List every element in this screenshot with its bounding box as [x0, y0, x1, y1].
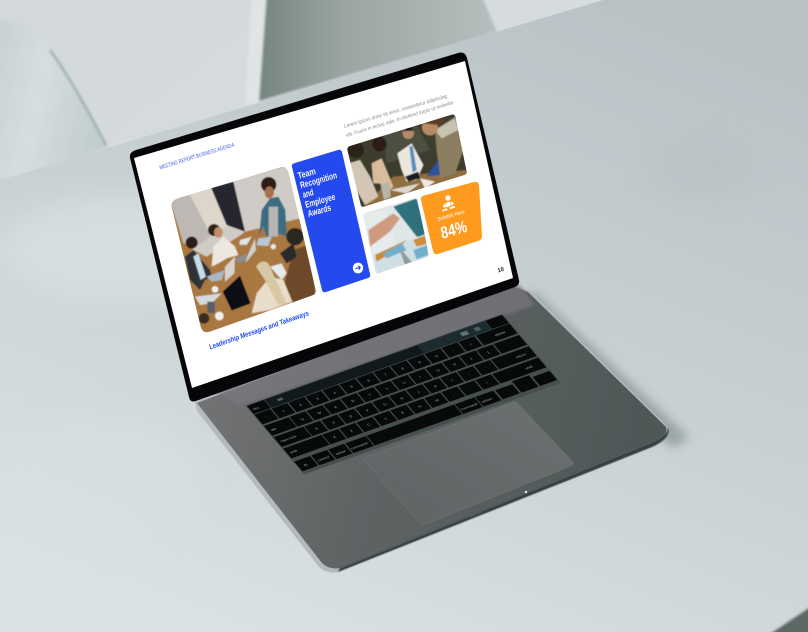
panel: orange stat card	[421, 182, 482, 254]
trackpad	[364, 402, 573, 525]
intro text block: elit. Fusce in lectus odio. In eleifend turpis ut molestie	[346, 100, 454, 139]
thumb notch and status light	[470, 491, 527, 517]
page number: 10	[497, 267, 505, 274]
front rim shadow	[338, 427, 669, 572]
card heading: Team	[297, 166, 317, 181]
keyboard	[245, 314, 561, 475]
card heading: and	[302, 187, 315, 200]
key legends	[252, 321, 548, 468]
laptop lid bezel	[130, 53, 519, 402]
panel: blue title card	[292, 150, 370, 292]
stat label: Subtitle Here	[437, 209, 465, 223]
card heading: Awards	[307, 203, 332, 219]
standing person at right	[435, 117, 463, 178]
photo panel: team meeting around table	[172, 167, 316, 332]
left chair	[0, 21, 108, 185]
icon: people	[442, 195, 455, 212]
dark table corner	[758, 602, 808, 632]
man with tie	[397, 143, 423, 182]
slide screen	[134, 61, 513, 388]
laptop base	[195, 283, 669, 572]
slide heading: MEETING REPORT BUSINESS AGENDA	[159, 142, 235, 171]
back chair	[245, 0, 497, 106]
woman in white sweater	[212, 237, 238, 267]
card heading: Employee	[304, 192, 336, 210]
man in white shirt at left	[349, 160, 378, 205]
woman with blond hair	[252, 277, 292, 313]
papers and cups	[257, 237, 272, 246]
card heading: Recognition	[299, 170, 338, 190]
card heading	[297, 166, 338, 219]
laptops on the table	[245, 238, 256, 262]
standing woman	[259, 197, 287, 237]
man at right in brown jacket	[284, 245, 315, 303]
key rows	[259, 329, 553, 466]
photo panel: colleagues around desk	[347, 114, 467, 207]
arrow keys	[493, 369, 557, 399]
stat value: 84%	[439, 217, 469, 243]
man at left in dark suit	[185, 250, 212, 290]
slide footer heading: Leadership Messages and Takeaways	[208, 308, 310, 351]
arrow button	[353, 263, 363, 273]
touch bar row	[247, 315, 509, 414]
laptop shadow	[520, 292, 690, 448]
photo panel: hand over charts	[363, 198, 429, 274]
woman in beige	[372, 158, 393, 193]
intro text block: Lorem ipsum dolor sit amet, consectetur adipiscing	[344, 94, 448, 130]
papers on desk	[420, 178, 435, 188]
